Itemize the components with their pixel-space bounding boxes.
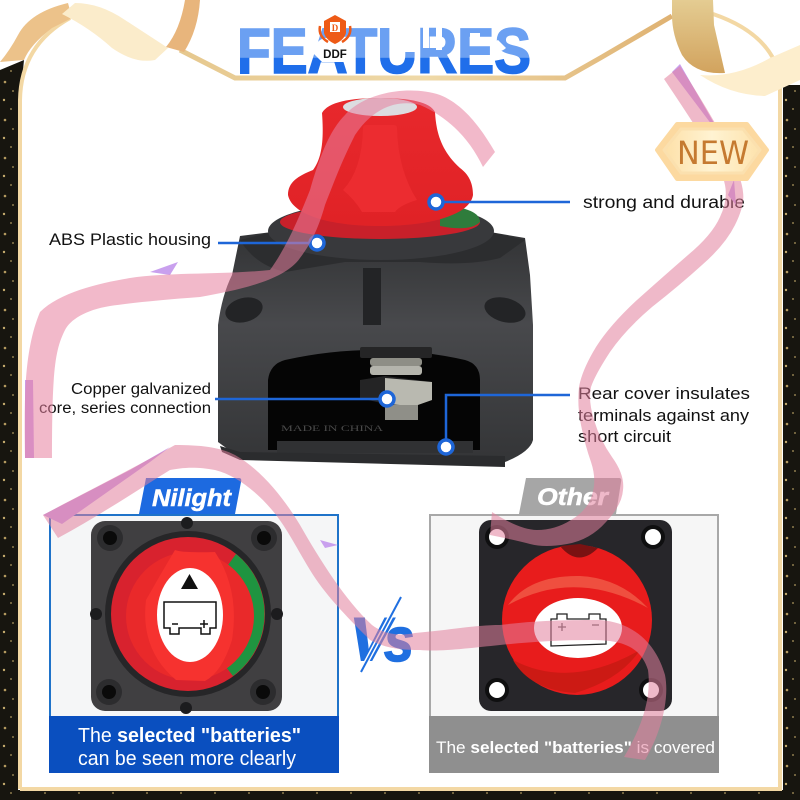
ribbon: lower pink [43, 445, 666, 760]
caption: Nilight: The selected "batteries" [78, 725, 301, 747]
logo: DDF shield [320, 15, 350, 61]
terminal window [268, 350, 480, 450]
title: FEATURES [237, 15, 531, 87]
tab: Other [519, 478, 621, 514]
caption: Other [429, 716, 719, 773]
caption: Nilight [49, 716, 339, 773]
photo: Nilight switch top view [90, 517, 283, 714]
VS mark [350, 597, 414, 675]
panel: Other [429, 478, 719, 773]
badge: NEW: NEW [677, 134, 749, 172]
callout: rear cover: short circuit [578, 428, 671, 446]
VS mark: V [350, 606, 395, 673]
callout: copper core [39, 381, 394, 417]
ribbon: upper pink [25, 91, 495, 458]
ribbon: right pink [490, 66, 743, 546]
switch housing [218, 232, 533, 462]
callout: strong and durable [429, 192, 745, 212]
tab: Nilight [139, 478, 241, 514]
callout: rear cover: Rear cover insulates [578, 385, 750, 403]
callout: rear cover: terminals against any [578, 407, 750, 425]
callout: rear cover [439, 385, 750, 454]
photo: other switch top view [479, 520, 672, 711]
product: battery switch side view [218, 98, 533, 467]
ribbon: purple slivers [25, 64, 736, 548]
gold ribbon: top right [672, 0, 800, 96]
logo: DDF shield: D [332, 23, 339, 33]
product: battery switch side view: MADE IN CHINA [281, 424, 383, 433]
rear cover shelf [277, 441, 473, 453]
badge: NEW [657, 124, 767, 179]
caption: Nilight: can be seen more clearly [78, 748, 296, 770]
switch ring [268, 202, 494, 260]
gold ribbon: top left [0, 0, 200, 62]
VS mark: s [384, 606, 414, 675]
bolt and nuts [360, 347, 432, 420]
tab: Other: Other [537, 484, 610, 511]
callout: ABS Plastic housing: ABS Plastic housing [49, 231, 211, 249]
callout: copper core: core, series connection [39, 400, 211, 417]
callout: strong and durable: strong and durable [583, 192, 745, 212]
red knob [288, 98, 473, 226]
logo: DDF shield: DDF [323, 49, 347, 61]
mounting holes [223, 268, 528, 327]
caption: Other: The selected "batteries" is covered [436, 738, 715, 757]
base plate [220, 446, 505, 467]
panel: Nilight [49, 478, 339, 773]
tab: Nilight: Nilight [152, 485, 232, 512]
callout: copper core: Copper galvanized [71, 381, 211, 398]
callout: ABS Plastic housing [49, 231, 324, 250]
